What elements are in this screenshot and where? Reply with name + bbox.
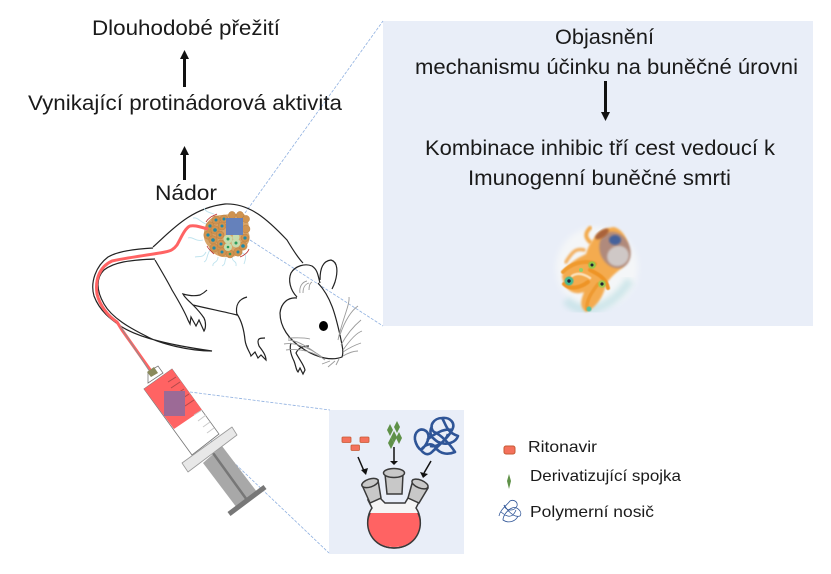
icon: mouse eye: [319, 321, 328, 331]
arrow: activity to survival: [183, 58, 186, 87]
text: mechanism heading: mechanismu účinku na buněčné úrovni: [415, 56, 798, 79]
drug path: infusion line: [97, 226, 208, 371]
legend: derivatizing linker: [507, 468, 681, 489]
text: combination of pathways: Imunogenní buněčné smrti: [468, 167, 731, 190]
text: combination of pathways: Kombinace inhibic tří cest vedoucí k: [425, 137, 776, 160]
illustration: mouse outline: [93, 204, 343, 374]
syringe selection square: [164, 391, 185, 416]
arrow: mechanism down: [604, 81, 607, 113]
icon: linker diamonds in flask panel: [387, 421, 402, 449]
icon: ritonavir tablets in flask panel: [342, 437, 369, 450]
needle shadow: [120, 326, 150, 372]
panel: mechanism background: [383, 21, 813, 326]
legend: ritonavir: [504, 439, 598, 456]
legend: polymer carrier: [499, 500, 654, 522]
text: mechanism heading: [415, 26, 798, 79]
title: survival: Dlouhodobé přežití: [92, 17, 280, 40]
illustration: syringe: [144, 366, 265, 514]
icon: tumor: [188, 208, 250, 266]
text: mechanism heading: Objasnění: [555, 26, 654, 49]
legend: polymer carrier: Polymerní nosič: [530, 504, 654, 521]
text: combination of pathways: [425, 137, 776, 190]
icon: polymer coil in flask panel: [415, 418, 458, 454]
tumor selection square: [226, 218, 243, 235]
whiskers: [284, 281, 362, 367]
icon: dying cell illustration: [556, 226, 638, 312]
legend: derivatizing linker: Derivatizující spojka: [530, 468, 681, 485]
legend: ritonavir: Ritonavir: [528, 439, 598, 456]
panel: synthesis background: [329, 410, 464, 554]
illustration: reaction flask: [361, 468, 429, 548]
heading: antitumor activity: Vynikající protinádorová aktivita: [28, 92, 342, 115]
label: tumor: Nádor: [155, 182, 217, 205]
arrows into flask: [358, 447, 431, 478]
arrow: tumor to activity: [183, 154, 186, 180]
